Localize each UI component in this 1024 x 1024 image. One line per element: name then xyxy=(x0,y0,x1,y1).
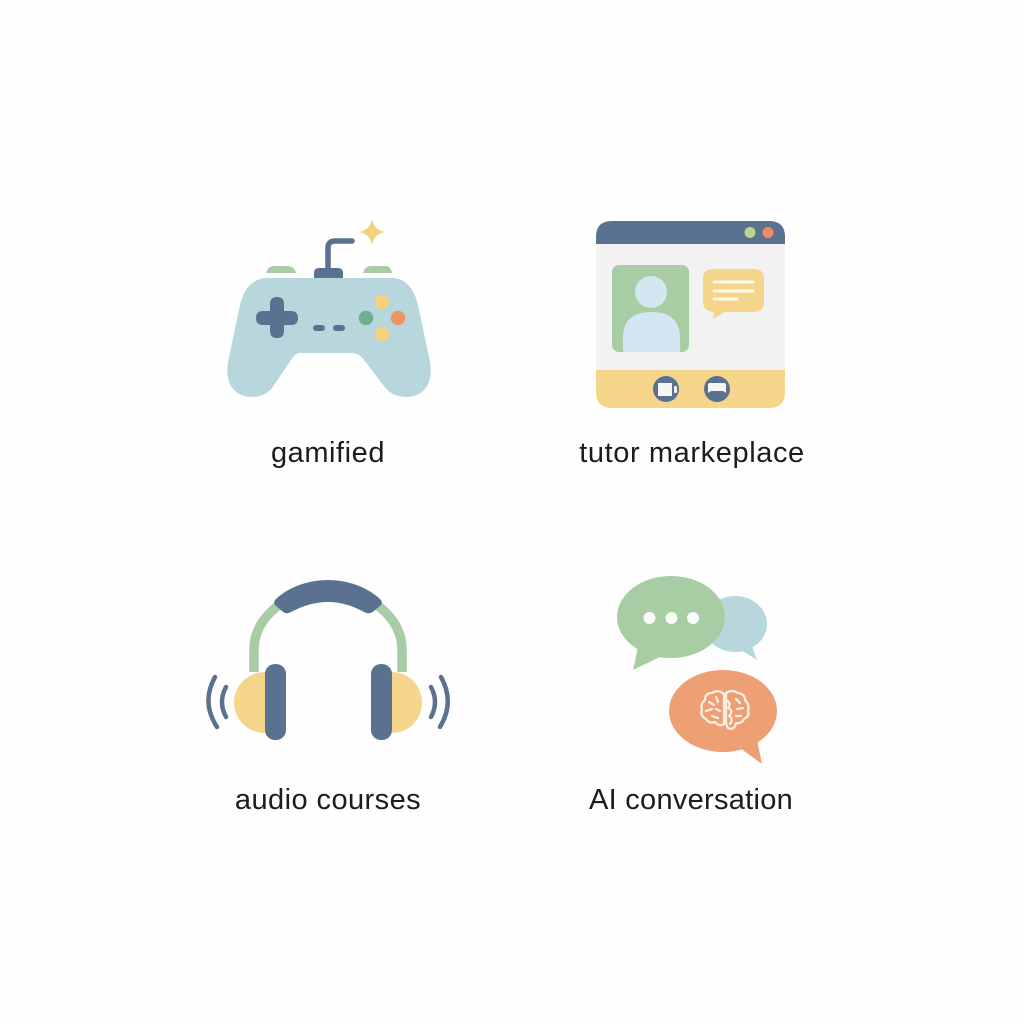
icon: tutor video window xyxy=(596,221,785,408)
label: gamified: gamified xyxy=(271,437,385,469)
label: AI conversation: AI conversation xyxy=(589,784,793,816)
icon: game controller xyxy=(227,219,431,397)
icon: brain xyxy=(701,691,749,729)
icon: AI conversation bubbles xyxy=(617,576,777,764)
label: audio courses: audio courses xyxy=(235,784,421,816)
label: tutor markeplace: tutor markeplace xyxy=(579,437,805,469)
icon: headphones xyxy=(208,580,448,740)
